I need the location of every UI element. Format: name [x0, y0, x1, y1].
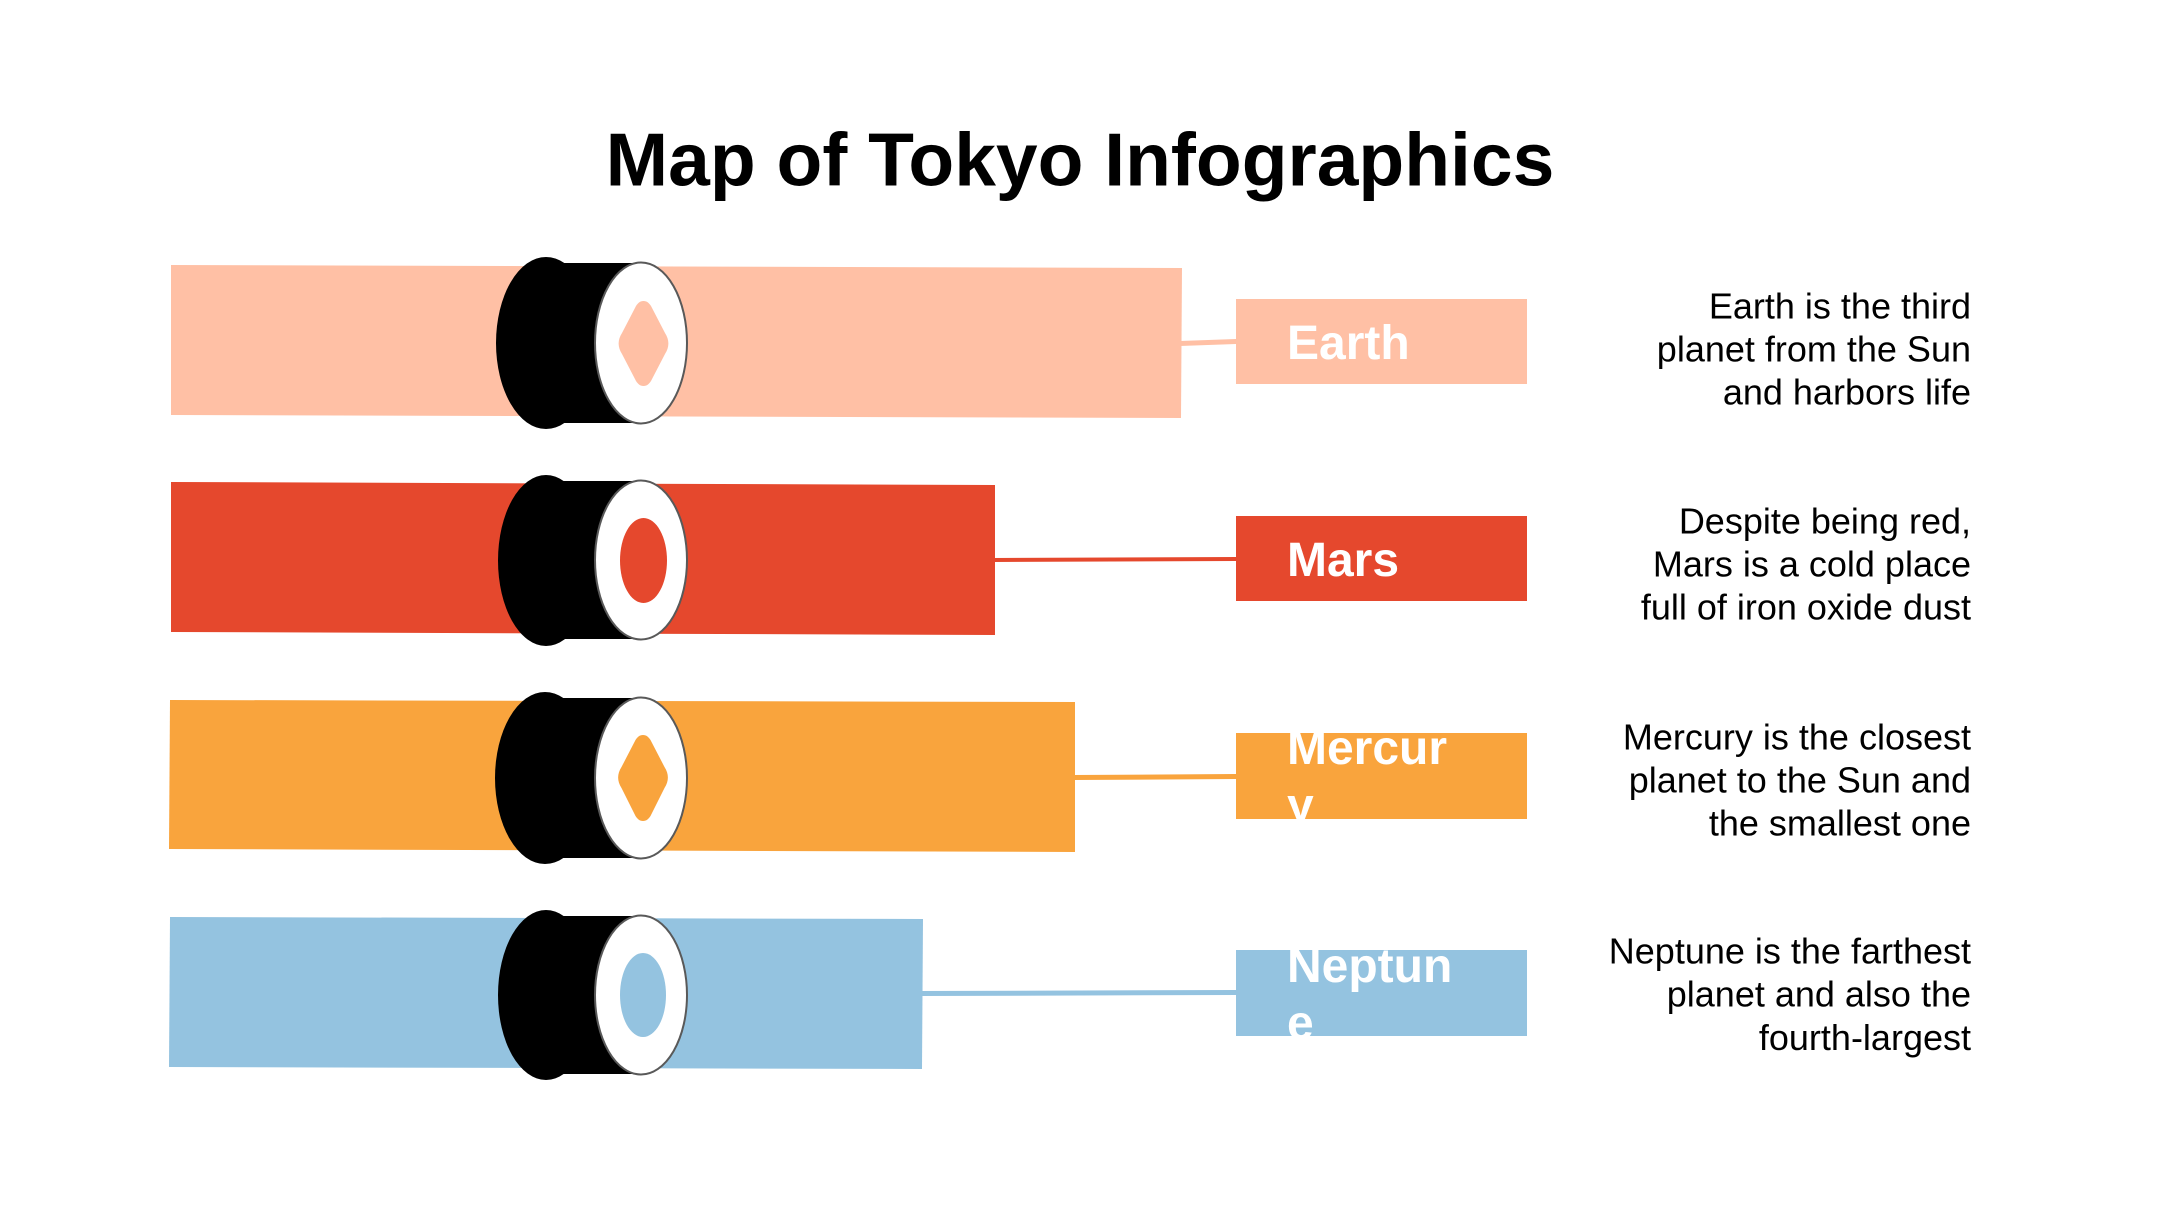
row: Mercury: [169, 692, 1971, 864]
description: Mercury: the smallest one: [1709, 803, 1971, 844]
description: Neptune: planet and also the: [1667, 974, 1971, 1015]
label: Mercury: [1236, 722, 1527, 832]
row: Neptune: [169, 910, 1971, 1080]
connector: Mercury: [1073, 774, 1236, 780]
description: Earth: Earth is the third: [1709, 286, 1971, 327]
icon: sushi roll Mercury: [495, 692, 687, 864]
bar: Earth: [171, 265, 1182, 418]
description: Earth: and harbors life: [1723, 372, 1971, 413]
icon: sushi roll Earth: [496, 257, 687, 429]
description: Neptune: Neptune is the farthest: [1609, 931, 1971, 972]
title: Map of Tokyo Infographics: [606, 118, 1554, 202]
description: Mercury: Mercury is the closest: [1623, 717, 1971, 758]
row: Earth: [171, 257, 1971, 429]
label: Neptune: Neptun: [1287, 940, 1452, 993]
label: Mars: Mars: [1287, 534, 1399, 587]
label: Earth: Earth: [1287, 317, 1410, 370]
bar: Neptune: [169, 917, 923, 1069]
connector: Earth: [1180, 339, 1236, 346]
description: Mars: Despite being red,: [1679, 501, 1971, 542]
label: Neptune: e: [1287, 997, 1314, 1050]
description: Mars: full of iron oxide dust: [1641, 587, 1971, 628]
description: Neptune: fourth-largest: [1759, 1017, 1971, 1058]
connector: Mars: [993, 557, 1236, 562]
icon: sushi roll Neptune: [498, 910, 687, 1080]
description: Mars: Mars is a cold place: [1653, 544, 1971, 585]
row: Mars: [171, 475, 1971, 646]
description: Earth: planet from the Sun: [1657, 329, 1971, 370]
label: Mars: [1236, 516, 1527, 601]
label: Earth: [1236, 299, 1527, 384]
label: Mercury: Mercur: [1287, 722, 1447, 775]
bar: Mars: [171, 482, 995, 635]
description: Mercury: planet to the Sun and: [1629, 760, 1971, 801]
label: Neptune: [1236, 940, 1527, 1050]
connector: Neptune: [920, 990, 1236, 996]
label: Mercury: y: [1287, 780, 1314, 832]
bar: Mercury: [169, 700, 1075, 852]
icon: sushi roll Mars: [498, 475, 687, 646]
